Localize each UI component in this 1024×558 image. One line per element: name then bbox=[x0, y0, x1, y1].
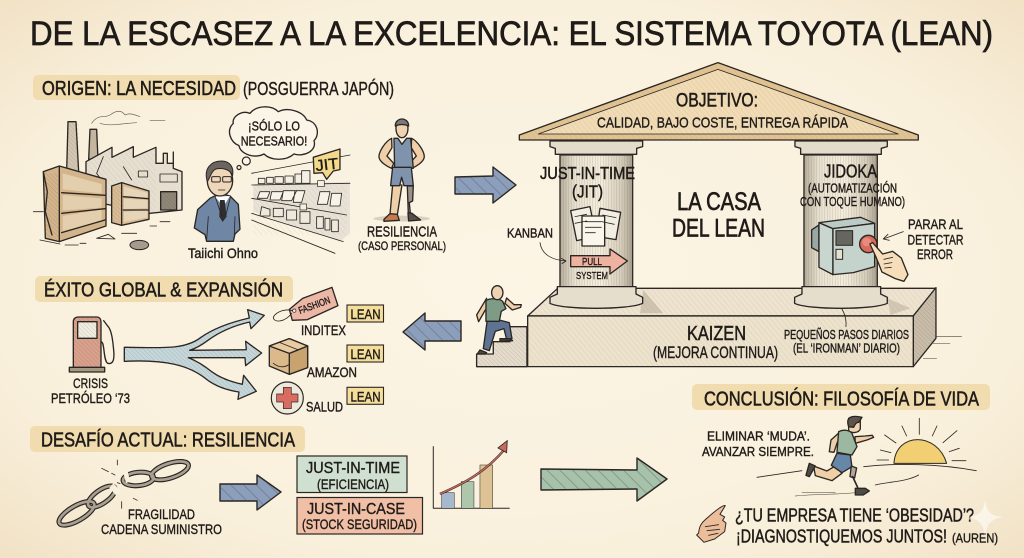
figure: Taiichi Ohno: Taiichi Ohno bbox=[188, 246, 258, 261]
figure: resilient athlete with prosthetic leg: RESILIENCIA bbox=[367, 225, 437, 241]
text: eliminar muda: AVANZAR SIEMPRE. bbox=[702, 444, 814, 459]
item: amazon: AMAZON bbox=[307, 365, 357, 380]
figure: resilient athlete with prosthetic leg: (CASO PERSONAL) bbox=[358, 239, 446, 253]
item: salud bbox=[271, 382, 384, 415]
left pillar: just-in-time: (JIT) bbox=[572, 182, 603, 202]
label: parar al detectar error: PARAR AL bbox=[908, 216, 963, 232]
arrow: pull system: PULL bbox=[582, 256, 602, 268]
box: just-in-time bbox=[297, 456, 407, 492]
panel: éxito global bbox=[35, 276, 384, 415]
item: salud: LEAN bbox=[350, 389, 380, 404]
platform: kaizen: PEQUEÑOS PASOS DIARIOS bbox=[784, 328, 909, 342]
call to action bbox=[735, 505, 998, 547]
illustration: supermarket shelves with JIT tag: JIT bbox=[315, 156, 340, 175]
chart: rising bars bbox=[433, 441, 509, 508]
heading: origen: ORIGEN: LA NECESIDAD bbox=[42, 78, 236, 100]
speech bubble: sólo lo necesario bbox=[230, 107, 317, 170]
label: parar al detectar error: ERROR bbox=[917, 246, 953, 262]
arrow: stairs to expansion bbox=[403, 313, 461, 350]
icon: ruined factory with empty shelves bbox=[33, 111, 182, 250]
label: kanban: KANBAN bbox=[507, 226, 553, 241]
icon: pointing hand bbox=[697, 506, 726, 542]
call to action: ¡DIAGNOSTIQUEMOS JUNTOS! bbox=[736, 526, 947, 547]
item: salud: SALUD bbox=[306, 400, 343, 415]
arrow: fragility to strategy bbox=[220, 475, 281, 510]
arrow: origen to house bbox=[455, 167, 516, 203]
speech bubble: sólo lo necesario: NECESARIO! bbox=[241, 134, 307, 149]
right pillar: jidoka: CON TOQUE HUMANO) bbox=[800, 195, 905, 209]
text: eliminar muda bbox=[702, 429, 814, 459]
text: la casa del lean bbox=[672, 188, 765, 243]
arrow: branching arrows bbox=[124, 310, 264, 399]
item: inditex: FASHION bbox=[297, 295, 332, 317]
label: parar al detectar error bbox=[883, 216, 964, 262]
item: amazon: LEAN bbox=[350, 347, 380, 362]
icon: sparkle bbox=[966, 500, 1004, 536]
arrow: pull system bbox=[571, 249, 627, 282]
figure: resilient athlete with prosthetic leg bbox=[358, 119, 446, 253]
platform: kaizen bbox=[528, 288, 962, 367]
left pillar: just-in-time: JUST-IN-TIME bbox=[540, 163, 635, 183]
right pillar: jidoka: JIDOKA bbox=[824, 162, 877, 182]
heading: éxito global: ÉXITO GLOBAL & EXPANSIÓN bbox=[44, 279, 283, 302]
panel: origen bbox=[33, 75, 446, 261]
call to action: (AUREN) bbox=[952, 531, 998, 546]
label: parar al detectar error: DETECTAR bbox=[908, 231, 964, 247]
item: amazon bbox=[269, 339, 384, 380]
right pillar: jidoka bbox=[795, 141, 964, 308]
label: kanban bbox=[507, 226, 566, 264]
illustration: supermarket shelves with JIT tag bbox=[252, 149, 350, 253]
figure: Taiichi Ohno bbox=[188, 161, 258, 261]
panel: casa del lean bbox=[507, 63, 964, 367]
pediment: objetivo: OBJETIVO: bbox=[676, 91, 758, 112]
heading: origen bbox=[33, 75, 394, 100]
heading: origen: (POSGUERRA JAPÓN) bbox=[243, 78, 394, 99]
panel: conclusión bbox=[692, 384, 1004, 547]
speech bubble: sólo lo necesario: ¡SÓLO LO bbox=[248, 119, 300, 134]
platform: kaizen: KAIZEN bbox=[687, 323, 746, 345]
panel: desafío actual bbox=[30, 426, 509, 537]
box: just-in-case: (STOCK SEGURIDAD) bbox=[302, 517, 417, 532]
figure: runner with prosthetic leg bbox=[806, 416, 874, 495]
box: just-in-case bbox=[297, 498, 422, 534]
left pillar: just-in-time bbox=[507, 141, 643, 308]
icon: sun on horizon bbox=[757, 418, 976, 496]
pediment: objetivo bbox=[519, 63, 918, 140]
icon: gas pump: PETRÓLEO ‘73 bbox=[51, 391, 130, 406]
icon: control box and stop button bbox=[812, 217, 908, 281]
text: la casa del lean: LA CASA bbox=[677, 188, 761, 216]
icon: broken chain: CADENA SUMINISTRO bbox=[101, 522, 222, 537]
icon: kanban cards bbox=[571, 207, 621, 246]
icon: gas pump: CRISIS bbox=[73, 376, 108, 391]
item: inditex: INDITEX bbox=[301, 323, 346, 338]
box: just-in-time: JUST-IN-TIME bbox=[306, 460, 400, 477]
item: inditex: LEAN bbox=[350, 307, 380, 322]
icon: broken chain: FRAGILIDAD bbox=[128, 507, 195, 522]
right pillar: jidoka: (AUTOMATIZACIÓN bbox=[808, 181, 897, 196]
heading: desafío actual: DESAFÍO ACTUAL: RESILIENCIA bbox=[41, 429, 296, 452]
text: la casa del lean: DEL LEAN bbox=[672, 215, 765, 243]
pediment: objetivo: CALIDAD, BAJO COSTE, ENTREGA RÁPIDA bbox=[597, 115, 848, 132]
box: just-in-time: (EFICIENCIA) bbox=[317, 477, 389, 492]
figure: person climbing stairs bbox=[477, 286, 527, 367]
arrow: challenge to conclusion bbox=[541, 458, 667, 501]
icon: gas pump bbox=[51, 317, 130, 406]
text: eliminar muda: ELIMINAR ‘MUDA’. bbox=[707, 429, 810, 444]
arrow: pull system: SYSTEM bbox=[576, 270, 608, 282]
item: inditex bbox=[273, 287, 384, 338]
platform: kaizen: (MEJORA CONTINUA) bbox=[653, 343, 778, 362]
icon: broken chain bbox=[56, 458, 222, 537]
platform: kaizen: (EL ‘IRONMAN’ DIARIO) bbox=[793, 342, 900, 356]
box: just-in-case: JUST-IN-CASE bbox=[307, 501, 405, 518]
